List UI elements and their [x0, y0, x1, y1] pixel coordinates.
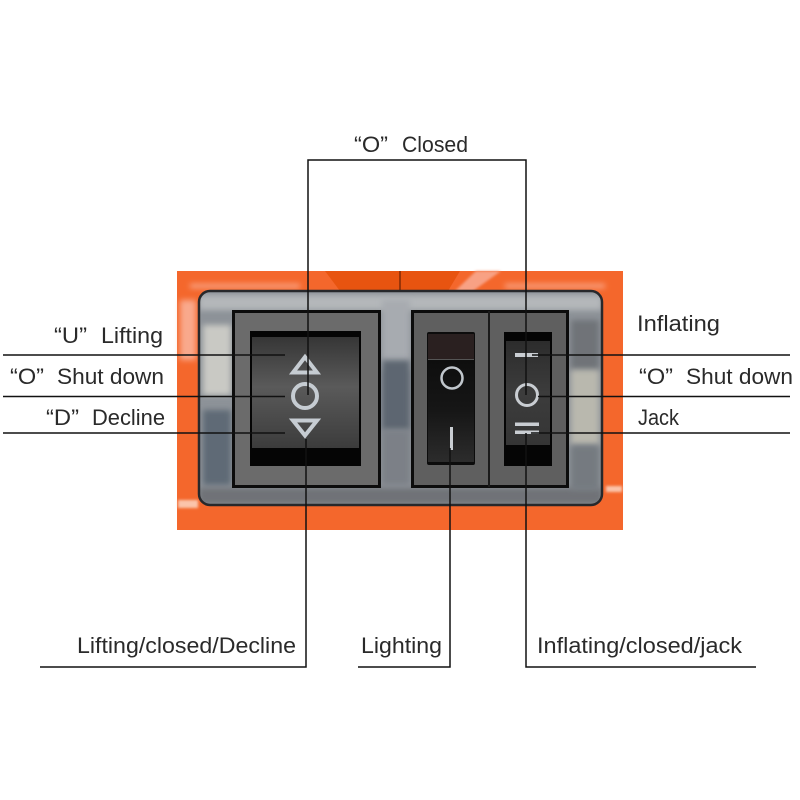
orange housing — [177, 271, 623, 530]
icon: single bar — [515, 353, 538, 357]
label: D Decline: Decline — [92, 405, 165, 430]
right switch recess — [412, 312, 568, 486]
icon: bar — [450, 427, 453, 450]
label: O Shut down right: “O” — [639, 364, 673, 389]
metal plate — [199, 291, 602, 505]
label: Inflating: Inflating — [637, 311, 720, 336]
label: Lighting: Lighting — [361, 633, 442, 658]
switch panel photo — [177, 271, 623, 530]
label: Inflating/closed/jack: Inflating/closed/jack — [537, 633, 743, 658]
label: O Closed: Closed — [402, 132, 468, 157]
label: O Closed: “O” — [354, 132, 388, 157]
icon: circle — [442, 368, 462, 388]
leader lines — [3, 160, 790, 667]
inflating rocker switch — [504, 332, 552, 466]
label: U Lifting: Lifting — [101, 323, 163, 348]
label: Jack: Jack — [638, 405, 680, 430]
label: Lifting/closed/Decline: Lifting/closed/Decline — [77, 633, 296, 658]
icon: up triangle — [293, 357, 317, 372]
left switch recess — [234, 312, 380, 486]
label: O Closed — [354, 132, 468, 157]
label: D Decline — [46, 405, 165, 430]
label: O Shut down right: Shut down — [686, 364, 793, 389]
icon: circle — [516, 384, 538, 406]
label: U Lifting: “U” — [54, 323, 87, 348]
label: U Lifting — [54, 323, 163, 348]
label: D Decline: “D” — [46, 405, 79, 430]
icon: circle — [293, 384, 317, 408]
label: O Shut down left — [10, 364, 164, 389]
label: O Shut down right — [639, 364, 793, 389]
icon: double bar — [515, 422, 539, 434]
left rocker switch — [250, 331, 361, 466]
icon: down triangle — [293, 420, 317, 436]
label: O Shut down left: “O” — [10, 364, 44, 389]
label: O Shut down left: Shut down — [57, 364, 164, 389]
lighting rocker switch — [427, 332, 475, 465]
